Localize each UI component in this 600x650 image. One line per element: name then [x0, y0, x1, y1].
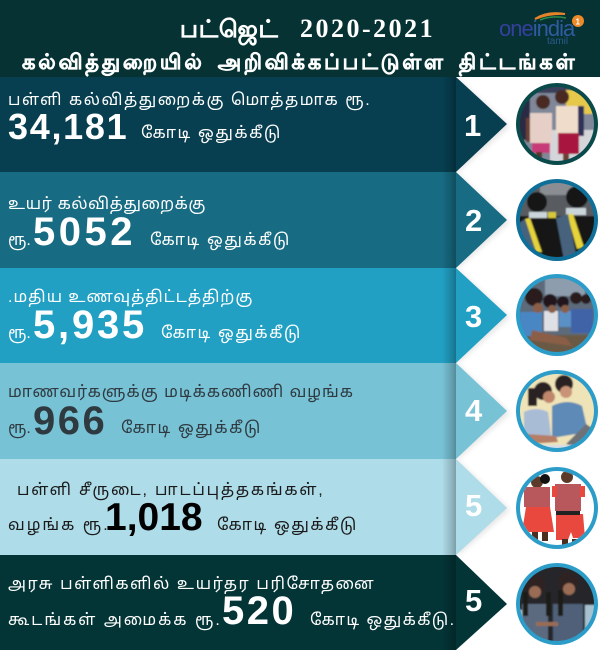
arrow 3	[456, 268, 510, 365]
band 4	[0, 363, 456, 459]
band 5 amount: 1,018	[105, 496, 203, 539]
band 2 amount: கோடி ஒதுக்கீடு	[150, 232, 291, 249]
band 6 text: அரசு பள்ளிகளில் உயர்தர பரிசோதனை	[8, 576, 375, 593]
photo 4	[516, 370, 598, 455]
band 2 text: உயர் கல்வித்துறைக்கு	[8, 196, 206, 213]
band 3 amount: ரூ.	[8, 325, 31, 342]
arrow 5: 5	[465, 488, 482, 523]
arrow 1	[456, 77, 510, 174]
band 4 amount: 966	[33, 399, 107, 443]
band 4 amount: ரூ.	[8, 420, 31, 437]
arrow 1: 1	[464, 108, 481, 143]
arrow 4: 4	[465, 393, 483, 428]
band 1 amount: கோடி ஒதுக்கீடு	[141, 125, 282, 142]
arrow 2	[456, 172, 510, 270]
band 1 amount	[8, 106, 282, 147]
photo 3	[516, 274, 598, 357]
band 6 amount: கூடங்கள் அமைக்க ரூ.	[8, 612, 222, 629]
band 5 amount	[8, 496, 358, 539]
photo 2	[516, 179, 598, 266]
band 6 amount: கோடி ஒதுக்கீடு.	[310, 612, 456, 629]
band 4 text: மாணவர்களுக்கு மடிக்கணிணி வழங்க	[8, 384, 354, 401]
logo: tamil	[547, 36, 568, 47]
band 3 amount	[8, 303, 302, 347]
band 5 text: பள்ளி சீருடை, பாடப்புத்தகங்கள்,	[17, 482, 324, 499]
band 3 text: .மதிய உணவுத்திட்டத்திற்கு	[8, 289, 253, 306]
band 6 amount	[8, 589, 456, 633]
title	[180, 14, 435, 46]
band 2 amount	[8, 210, 291, 254]
title: 2020-2021	[300, 14, 435, 43]
arrow 2: 2	[465, 203, 482, 238]
band 5	[0, 459, 456, 555]
band 1	[0, 77, 456, 172]
arrows and photos	[456, 12, 598, 650]
band 1 amount: 34,181	[8, 106, 128, 147]
subtitle: கல்வித்துறையில் அறிவிக்கப்பட்டுள்ள திட்டங்கள்	[22, 50, 577, 74]
band 3 amount: கோடி ஒதுக்கீடு	[161, 325, 302, 342]
photo 1	[516, 83, 598, 170]
band 2 amount: 5052	[33, 210, 136, 254]
band 4 amount	[8, 399, 262, 443]
photo 6	[516, 563, 599, 646]
arrow 6	[456, 555, 507, 650]
arrow 6: 5	[465, 583, 482, 618]
logo swoosh	[535, 13, 584, 27]
header	[0, 0, 600, 77]
arrow 5	[456, 459, 510, 557]
photo 5	[516, 467, 598, 549]
band 6 amount: 520	[222, 589, 296, 633]
arrow 3: 3	[465, 299, 482, 334]
band 3	[0, 268, 456, 363]
band 4 amount: கோடி ஒதுக்கீடு	[121, 420, 262, 437]
band 3 amount: 5,935	[33, 303, 147, 347]
band 5 amount: கோடி ஒதுக்கீடு	[217, 517, 358, 534]
logo swoosh: 1	[576, 18, 580, 26]
band 1 text: பள்ளி கல்வித்துறைக்கு மொத்தமாக ரூ.	[8, 92, 371, 109]
band 2	[0, 172, 456, 268]
arrow 4	[456, 363, 510, 461]
band 2 amount: ரூ.	[8, 232, 31, 249]
logo: oneindia	[499, 16, 574, 41]
title: பட்ஜெட்	[180, 17, 279, 43]
band 6	[0, 555, 456, 650]
band 5 amount: வழங்க ரூ.	[8, 517, 110, 534]
